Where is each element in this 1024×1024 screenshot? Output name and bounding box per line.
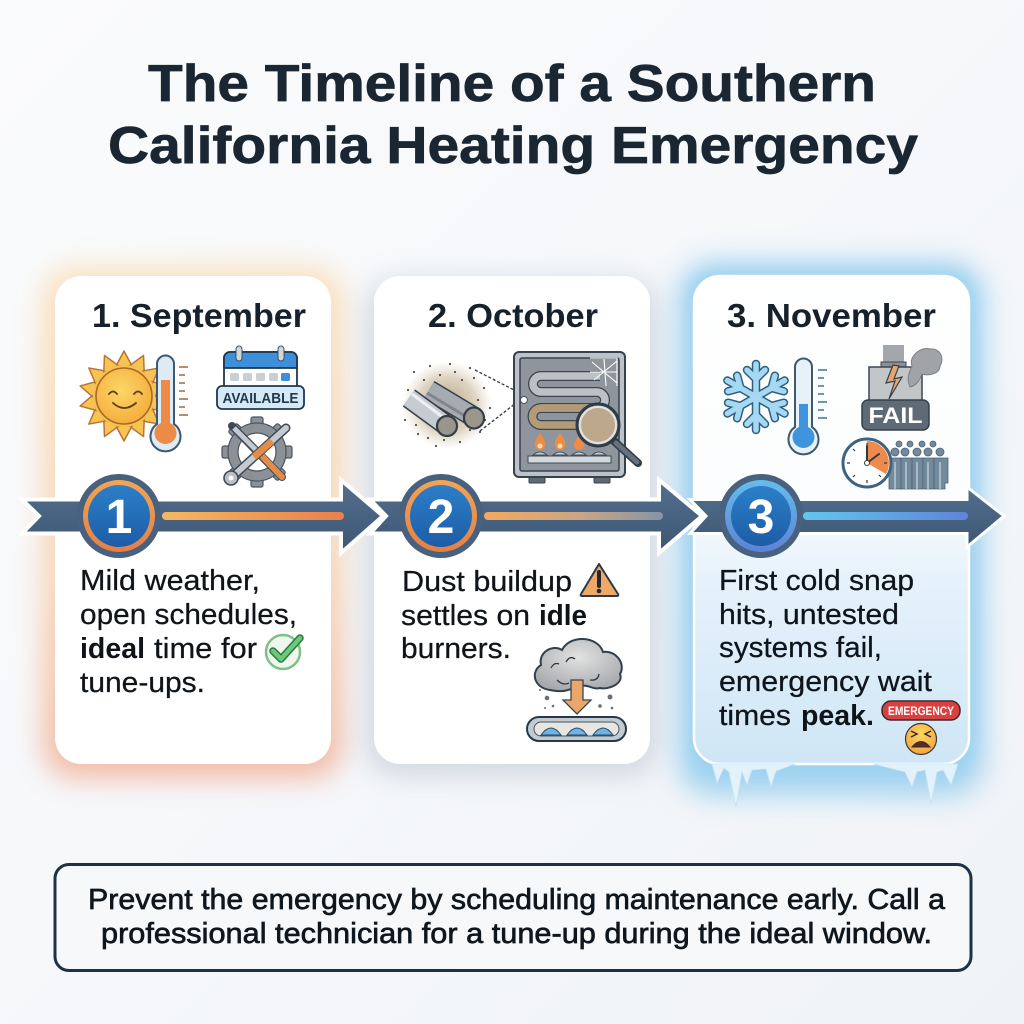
icon: cold thermometer xyxy=(788,358,827,454)
step badge 1 xyxy=(77,474,161,558)
timeline arrow 3 xyxy=(690,487,1004,547)
text: October description: settles on xyxy=(401,600,530,632)
icon: warning triangle xyxy=(581,564,618,596)
icon: dust cloud settling on burners xyxy=(527,639,626,741)
text: November description: First cold snap xyxy=(719,565,914,597)
heading: November: 3. November xyxy=(727,297,936,334)
step badge 3: 3 xyxy=(748,491,774,544)
panel: September card xyxy=(43,268,343,778)
icon: dusty furnace xyxy=(514,352,638,483)
progress bar 2 xyxy=(484,512,663,520)
title: The Timeline of a Southern xyxy=(148,55,876,113)
text: November description: emergency wait xyxy=(719,666,932,698)
progress bar 3 xyxy=(803,512,968,520)
icon: clock with waiting crowd xyxy=(843,439,948,489)
icon: warm thermometer xyxy=(150,356,188,451)
text: September description: tune-ups. xyxy=(80,667,205,699)
icicles xyxy=(712,764,958,807)
panel: October card xyxy=(366,276,658,776)
text: November description: systems fail, xyxy=(719,632,882,664)
text: September description: time for xyxy=(154,633,257,665)
text: October description xyxy=(401,566,587,665)
emergency badge xyxy=(882,701,960,720)
icon: calendar available: AVAILABLE xyxy=(222,391,299,407)
title xyxy=(108,55,918,175)
text: November description xyxy=(719,565,932,732)
step badge 2: 2 xyxy=(428,491,454,544)
step badge 2 xyxy=(399,474,483,558)
icon: green check xyxy=(266,635,300,669)
callout: call to action xyxy=(55,864,971,970)
step badge 3 xyxy=(719,474,803,558)
timeline arrow 2 xyxy=(370,480,702,553)
callout: call to action: professional technician for a tune-up during the ideal window. xyxy=(101,918,932,950)
icon: snowflake xyxy=(723,364,789,430)
text: September description: Mild weather, xyxy=(80,565,260,597)
icon: failed furnace xyxy=(862,345,942,430)
icon: dusty pipes xyxy=(402,361,516,449)
heading: October: 2. October xyxy=(428,297,598,334)
emergency badge: EMERGENCY xyxy=(888,706,954,718)
text: September description: ideal xyxy=(80,633,145,665)
icon: failed furnace: FAIL xyxy=(868,403,922,428)
icon: calendar available xyxy=(217,346,304,409)
text: November description: peak. xyxy=(801,700,874,732)
text: November description: hits, untested xyxy=(719,599,899,631)
callout: call to action: Prevent the emergency by scheduling maintenance early. Call a xyxy=(88,884,945,916)
text: November description: times xyxy=(719,700,791,732)
title: California Heating Emergency xyxy=(108,117,918,175)
step badge 1: 1 xyxy=(106,491,132,544)
heading: September: 1. September xyxy=(92,297,306,334)
text: October description: idle xyxy=(539,600,587,632)
text: September description xyxy=(80,565,297,699)
text: October description: Dust buildup xyxy=(402,566,572,598)
icon: distressed face xyxy=(906,724,936,754)
text: October description: burners. xyxy=(401,633,511,665)
icon: gear and tools xyxy=(222,417,292,487)
progress bar 1 xyxy=(162,512,344,520)
icon: smiling sun xyxy=(78,351,170,441)
panel: November card xyxy=(678,262,984,807)
timeline arrow 1 xyxy=(22,480,383,553)
text: September description: open schedules, xyxy=(80,599,297,631)
